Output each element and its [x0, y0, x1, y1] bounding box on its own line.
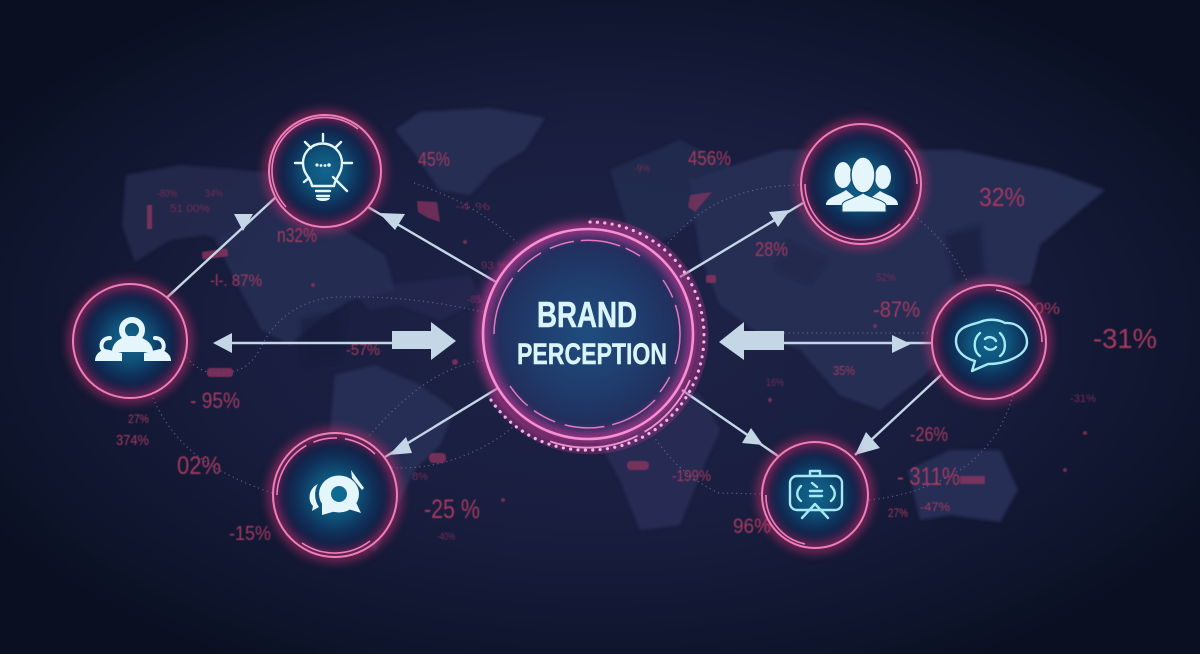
percentage labels: 27% — [128, 412, 149, 426]
arrow: double-headed right — [719, 322, 933, 360]
node: feedback screen — [762, 442, 868, 548]
percentage labels: 8% — [412, 471, 428, 483]
icon: chat screen — [790, 471, 842, 518]
world map — [122, 108, 1105, 552]
percentage labels: 52% — [876, 272, 896, 284]
percentage labels: -4 % — [455, 201, 490, 213]
center hub: brand perception — [483, 222, 704, 450]
arrow: people to idea — [161, 197, 276, 303]
percentage labels: -40% — [437, 531, 455, 543]
percentage labels: -85 — [467, 294, 481, 306]
icon: speech bubbles — [310, 470, 364, 515]
percentage labels: 51 00% — [170, 203, 210, 215]
arrow: chat to feedback — [855, 375, 941, 455]
percentage labels: 374% — [116, 432, 149, 449]
icon: speech bubble with cycle — [956, 320, 1027, 371]
node: chat refresh — [932, 285, 1046, 399]
icon: three people — [826, 157, 898, 212]
percentage labels: -47% — [920, 500, 950, 514]
percentage labels: -15% — [229, 523, 271, 545]
percentage labels: 96% — [733, 515, 771, 538]
percentage labels: n32% — [277, 225, 317, 247]
map hot spots — [147, 192, 1087, 502]
percentage labels: -9% — [634, 163, 650, 175]
dotted connection arcs — [144, 183, 1018, 500]
percentage labels: 35% — [833, 363, 855, 378]
node: team — [801, 124, 921, 244]
percentage labels: -l-. 87% — [210, 271, 262, 290]
icon: group of three — [95, 320, 171, 361]
percentage labels: 93 % — [481, 260, 507, 272]
percentage labels: -87% — [873, 297, 920, 322]
heading: brand: BRAND — [537, 294, 637, 335]
percentage labels: 45% — [418, 149, 450, 171]
percentage labels: 32% — [979, 182, 1025, 212]
percentage labels: -57% — [346, 342, 380, 359]
percentage labels: 27% — [888, 506, 908, 520]
percentage labels: -26% — [910, 424, 948, 446]
arrow: brand to bottom-left — [385, 388, 498, 457]
percentage labels: 16% — [766, 377, 784, 389]
arrow: brand to team — [680, 203, 803, 277]
node: idea bulb — [269, 115, 381, 227]
percentage labels: -31% — [1093, 323, 1157, 354]
percentage labels: -80% — [157, 188, 177, 200]
arrow: brand to feedback — [682, 390, 778, 456]
percentage labels: -31% — [1070, 393, 1096, 405]
arrow: double-headed left — [213, 322, 456, 360]
heading: perception: PERCEPTION — [517, 338, 667, 371]
percentage labels: 02% — [177, 452, 221, 480]
arrow: brand to idea — [368, 207, 496, 282]
percentage labels: 34% — [205, 188, 223, 200]
percentage labels: - 95% — [190, 388, 240, 413]
percentage labels: - 311% — [897, 463, 960, 491]
percentage labels: 28% — [755, 239, 788, 261]
icon: light bulb — [295, 134, 352, 201]
dot ring — [489, 222, 704, 450]
percentage labels: 30% — [1024, 299, 1060, 318]
percentage labels: -199% — [672, 468, 711, 485]
node: conversation — [273, 433, 397, 557]
percentage labels: 456% — [688, 148, 731, 170]
percentage labels: -25 % — [424, 494, 480, 524]
percentage labels — [116, 148, 1157, 545]
map dark patches — [300, 225, 985, 365]
node: community people — [73, 284, 187, 398]
